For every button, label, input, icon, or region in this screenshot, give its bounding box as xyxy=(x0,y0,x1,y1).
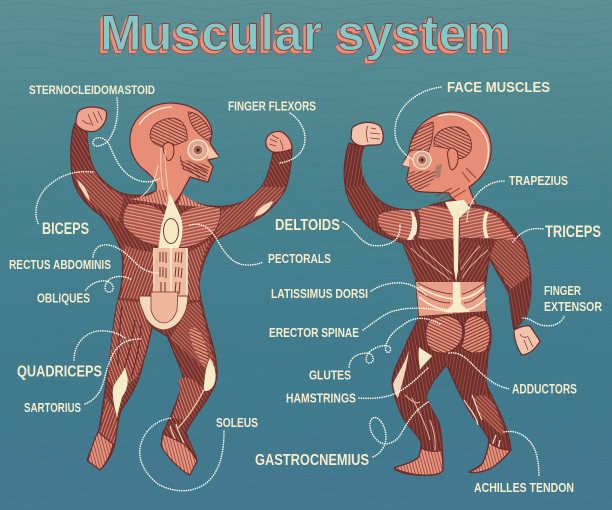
back right forearm xyxy=(510,278,531,328)
front right biceps highlight xyxy=(254,201,273,217)
right shin strands xyxy=(170,388,205,445)
left pectoral xyxy=(123,204,168,247)
right calf xyxy=(172,378,204,420)
right foot xyxy=(161,434,197,475)
label: obliques: OBLIQUES xyxy=(37,290,90,306)
back latissimus left xyxy=(404,238,453,282)
back head xyxy=(402,112,491,205)
leader: trapezius xyxy=(467,181,504,222)
back left thigh highlight xyxy=(393,350,409,398)
right thigh outer muscle xyxy=(189,328,208,367)
label: biceps: BICEPS xyxy=(42,220,89,238)
label: glutes: GLUTES xyxy=(309,368,351,382)
leader: soleus xyxy=(140,418,224,491)
front neck muscle strands xyxy=(140,148,170,208)
leader: achilles tendon xyxy=(504,431,539,477)
back right thigh xyxy=(445,352,488,416)
back latissimus right xyxy=(460,238,490,283)
back trapezius left xyxy=(418,206,454,240)
front head temple muscle xyxy=(150,118,187,148)
title: Muscular system xyxy=(100,5,512,61)
leader: glutes xyxy=(349,318,441,367)
back knee muscle xyxy=(474,395,504,436)
left shin xyxy=(100,398,117,446)
back left leg strands xyxy=(405,395,435,452)
label: sternocleidomastoid: STERNOCLEIDOMASTOID xyxy=(29,83,155,97)
front right forearm xyxy=(262,150,291,187)
leader: biceps xyxy=(36,172,93,225)
left knee patch xyxy=(113,367,128,418)
label: pectorals: PECTORALS xyxy=(268,251,331,266)
back raised fist xyxy=(351,122,383,146)
front nose xyxy=(208,146,219,159)
left obliques xyxy=(120,245,154,300)
back ear xyxy=(448,148,458,170)
rectus abdominis xyxy=(154,248,187,298)
back raised upper arm xyxy=(346,185,386,222)
leader: quadriceps xyxy=(74,331,125,360)
leader: deltoids xyxy=(343,222,400,246)
back shoulder cream stripe xyxy=(483,212,489,238)
front left forearm xyxy=(73,132,94,172)
back knee cream strands xyxy=(464,395,500,456)
right pectoral xyxy=(176,206,220,247)
lower abdomen xyxy=(151,292,178,323)
sternum xyxy=(158,193,183,250)
front ear xyxy=(163,143,174,161)
back trapezius right xyxy=(460,208,516,240)
back right foot xyxy=(469,442,511,473)
sternum oval xyxy=(164,218,178,244)
left foot xyxy=(88,432,113,470)
label: finger extensor: FINGER xyxy=(544,284,581,298)
leader: obliques xyxy=(86,276,132,292)
leader: finger extensor xyxy=(523,315,565,326)
back left calf xyxy=(400,396,441,445)
back face cheek patch xyxy=(434,164,442,178)
back head eye ring xyxy=(413,151,431,169)
label: gastrocnemius: GASTROCNEMIUS xyxy=(255,452,369,469)
front face lower muscles xyxy=(180,160,210,180)
leader: hamstrings xyxy=(359,367,429,398)
label: finger flexors: FINGER FLEXORS xyxy=(228,100,316,114)
back neck stripes xyxy=(436,168,476,202)
left thigh outlines xyxy=(118,305,141,378)
front left fist xyxy=(76,107,107,132)
label: rectus abdominis: RECTUS ABDOMINIS xyxy=(9,258,111,272)
label: soleus: SOLEUS xyxy=(216,416,258,430)
right thigh xyxy=(170,302,215,372)
label: achilles tendon: ACHILLES TENDON xyxy=(474,481,574,495)
back hip cream patch xyxy=(419,347,432,370)
back face lower muscles xyxy=(407,170,436,191)
back head temple muscle xyxy=(434,127,471,159)
front head eye ring xyxy=(188,140,208,160)
left thigh xyxy=(108,300,151,392)
label: erector spinae: ERECTOR SPINAE xyxy=(269,325,359,340)
front left biceps xyxy=(75,172,124,222)
back head forehead muscle xyxy=(409,122,433,152)
back head highlight xyxy=(438,114,488,170)
figure: back view muscular body xyxy=(344,112,540,475)
back deltoid xyxy=(378,210,415,240)
leader: adductors xyxy=(449,353,510,389)
back lat lines xyxy=(411,246,488,280)
label: latissimus dorsi: LATISSIMUS DORSI xyxy=(271,287,368,301)
figure: front view muscular body xyxy=(71,103,292,475)
leader: triceps xyxy=(513,229,543,242)
leader: latissimus dorsi xyxy=(371,283,426,295)
back deltoid cream band xyxy=(407,210,417,240)
right knee patch xyxy=(204,358,216,391)
leader: gastrocnemius xyxy=(370,402,428,457)
label: quadriceps: QUADRICEPS xyxy=(17,364,102,380)
front right fist xyxy=(266,131,292,152)
label: deltoids: DELTOIDS xyxy=(275,217,340,234)
leader: erector spinae xyxy=(363,308,453,330)
leader: finger flexors xyxy=(280,113,305,163)
right obliques xyxy=(186,240,210,300)
label: adductors: ADDUCTORS xyxy=(512,382,577,396)
back lower fist fingers xyxy=(520,334,533,350)
label: trapezius: TRAPEZIUS xyxy=(509,174,568,188)
leader: sternocleidomastoid xyxy=(93,98,160,182)
front body silhouette xyxy=(71,123,292,475)
leader: pectorals xyxy=(190,224,263,265)
back body silhouette xyxy=(344,143,531,475)
upper chest trapezius xyxy=(130,190,215,208)
back lower ribs xyxy=(416,282,486,316)
label: hamstrings: HAMSTRINGS xyxy=(286,390,356,406)
front head highlight xyxy=(139,107,172,125)
back lower fist xyxy=(514,326,540,355)
front head forehead muscle xyxy=(188,112,212,141)
label: finger extensor: EXTENSOR xyxy=(544,300,602,314)
back raised forearm xyxy=(345,146,366,188)
leader: sartorius xyxy=(85,339,142,404)
label: sartorius: SARTORIUS xyxy=(24,401,81,415)
label: face muscles: FACE MUSCLES xyxy=(447,79,550,96)
back left foot xyxy=(394,448,443,475)
back right glute xyxy=(461,316,490,354)
back nose xyxy=(402,154,409,167)
pelvis xyxy=(139,296,188,330)
back right triceps xyxy=(490,240,530,290)
leader: rectus abdominis xyxy=(93,245,158,273)
front left biceps highlight xyxy=(77,180,90,201)
front head xyxy=(130,103,219,210)
leader: face muscles xyxy=(395,87,441,160)
front right upper arm xyxy=(216,187,285,238)
front face cheek stripes xyxy=(180,156,207,178)
back left glute xyxy=(426,316,463,353)
back spine xyxy=(445,200,470,282)
